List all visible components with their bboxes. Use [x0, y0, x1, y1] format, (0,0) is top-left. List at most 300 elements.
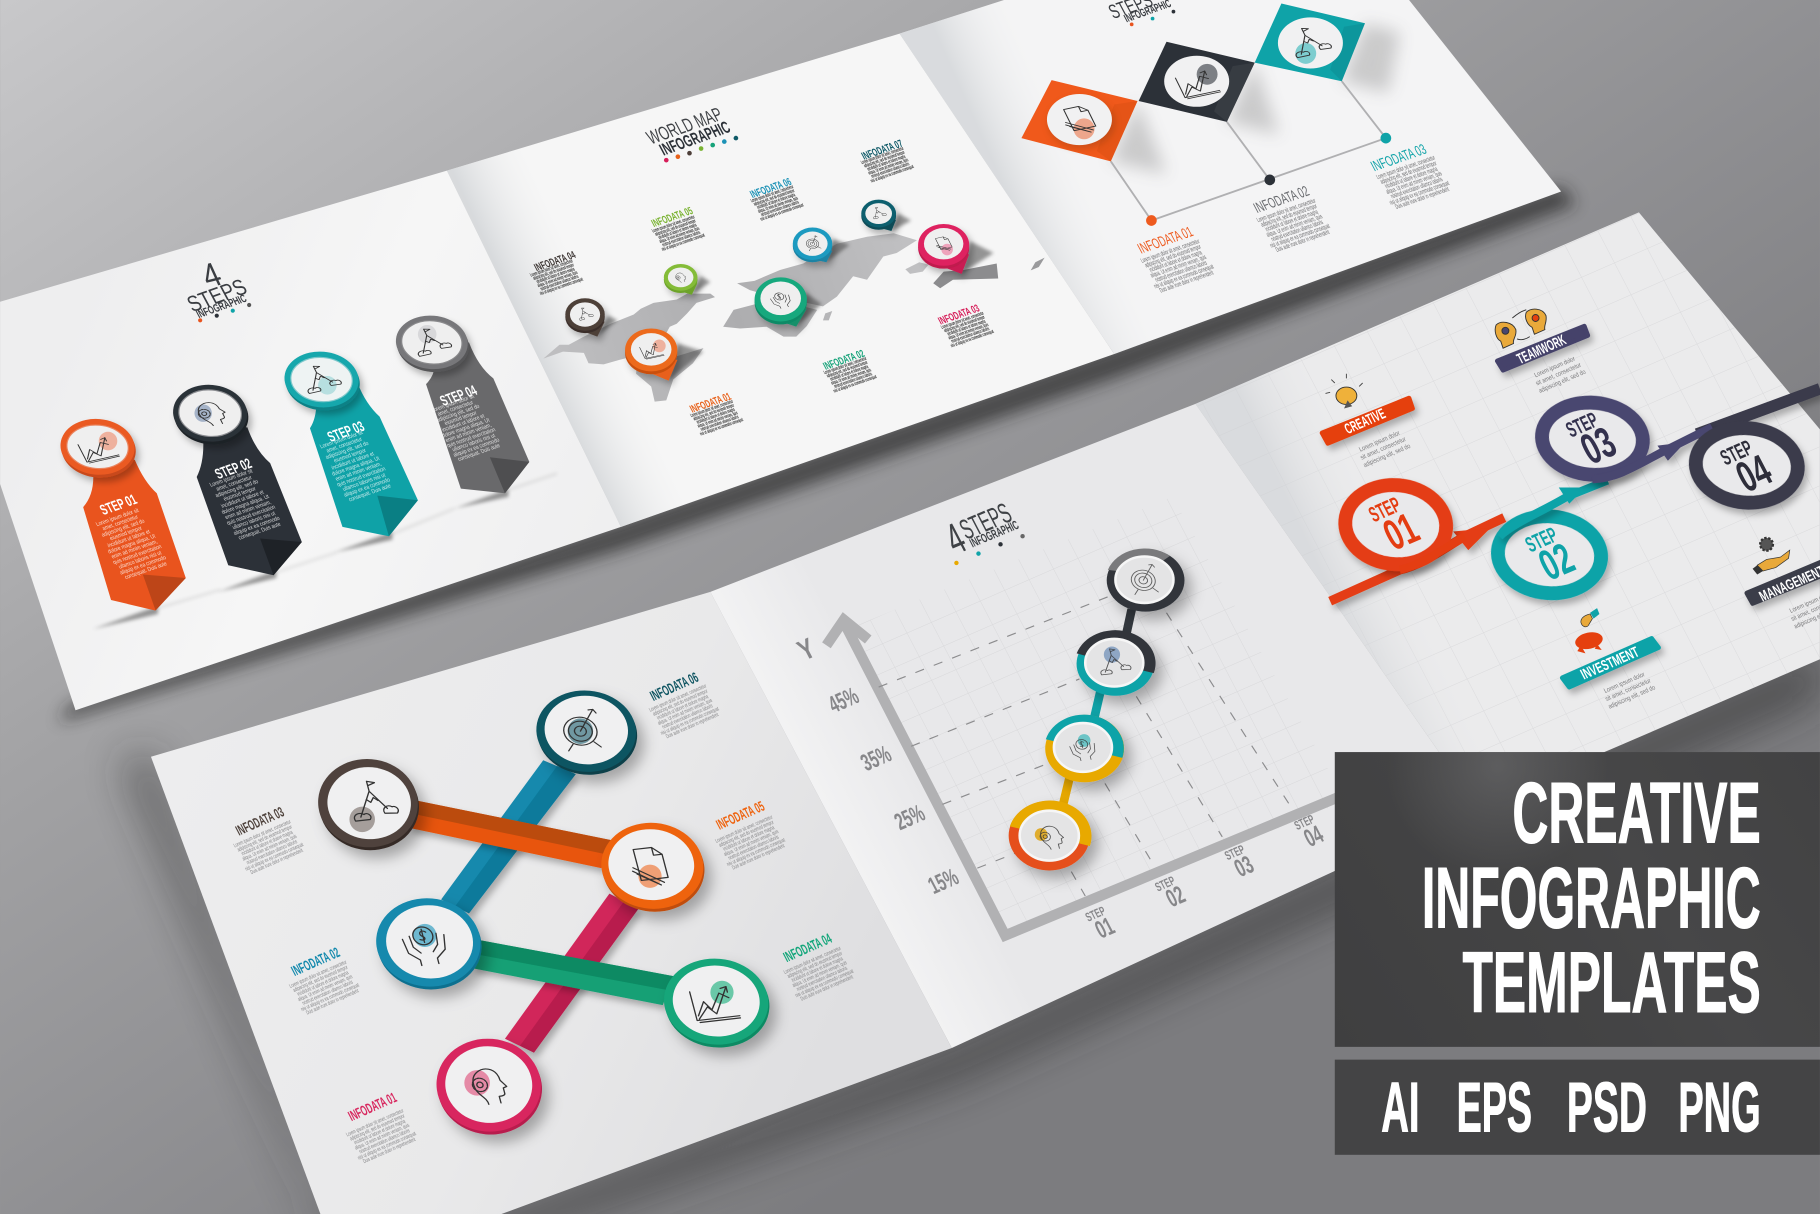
pin: step 02: ullamco laboris nisi ut: [231, 511, 277, 531]
callout: investment: Lorem ipsum dolor: [1603, 672, 1646, 695]
ring: step 04: [1693, 424, 1801, 507]
callout: investment: sit amet, consectetur: [1605, 678, 1652, 703]
title: 4 steps infographic: STEPS: [183, 275, 251, 317]
label: infodata 04: Duis aute irure dolor in reprehenderit: [799, 974, 855, 1003]
x axis values: [1083, 812, 1328, 944]
label: infodata 03 map: [936, 302, 995, 349]
y axis values: 15%: [924, 864, 963, 900]
y axis values: 35%: [857, 741, 896, 777]
label: infodata 01: INFODATA 01: [346, 1090, 400, 1125]
map pin: orange: [625, 328, 677, 381]
pin: step 04: ullamco laboris nisi ut: [451, 433, 497, 453]
shadow under top brochure: [58, 186, 1576, 722]
label: infodata 05: aliqua. Ut enim ad minim veniam, quis: [658, 225, 701, 244]
label: infodata 04: [528, 249, 584, 296]
title: 4 steps infographic: [183, 255, 251, 322]
label: infodata 03: nostrud exercitation ullamco laboris: [1390, 176, 1444, 201]
pin: step 01: ullamco laboris nisi ut: [118, 550, 163, 571]
map pin: dark teal: [861, 200, 896, 231]
label: infodata 02: Lorem ipsum dolor sit amet, consectetur: [1256, 198, 1317, 224]
panel: product title: [1335, 752, 1820, 1047]
callout: teamwork: sit amet, consectetur: [1535, 362, 1583, 387]
pin: step 02: [171, 382, 302, 575]
panel: file formats: [1335, 1060, 1820, 1155]
label: infodata 07: aliqua. Ut enim ad minim veniam, quis: [867, 156, 910, 176]
pin: step 01: adipiscing elit, sed do: [101, 518, 146, 539]
x axis values: STEP: [1153, 874, 1178, 895]
panel: world map: [528, 104, 1045, 437]
bar: orange: [407, 801, 612, 868]
circle: infodata 06: [533, 686, 641, 779]
bottom brochure sheet: [151, 212, 1820, 1214]
label: infodata 06: [648, 670, 723, 742]
label: infodata 02 map: Lorem ipsum dolor sit amet, consectetur: [822, 355, 868, 375]
pin: step 04: consequat. Duis aute: [457, 443, 502, 463]
pin: step 03: [282, 349, 418, 536]
label: infodata 07: Lorem ipsum dolor sit amet, consectetur: [859, 145, 905, 165]
title: 4 steps infographic: [937, 497, 1025, 565]
panel: steps flow: [1322, 309, 1820, 711]
pin: step 02: eiusmod tempor: [223, 486, 257, 503]
ribbon: red: [1330, 518, 1504, 601]
bar: green: [471, 940, 673, 1005]
ring: step 02: [1495, 512, 1604, 597]
ring: step 04: STEP: [1716, 435, 1757, 470]
page: world map: [447, 34, 1114, 527]
map pin: blue: [793, 227, 832, 262]
label: infodata 01: INFODATA 01: [1135, 224, 1196, 257]
label: infodata 03: Duis aute irure dolor in reprehenderit: [249, 847, 305, 876]
label: infodata 02: adipiscing elit, sed do eiusmod tempor: [1260, 203, 1319, 229]
page: diamonds: [900, 0, 1561, 354]
y axis label: Y: [793, 633, 821, 667]
circle: infodata 01: [433, 1034, 546, 1139]
chart grid: [853, 497, 1346, 938]
label: infodata 01: nostrud exercitation ullamco laboris: [358, 1127, 412, 1156]
label: infodata 01 map: [688, 391, 745, 437]
diamond: dark: [1139, 42, 1255, 122]
label: infodata 02: nisi ut aliquip ex ea commodo consequat: [300, 982, 361, 1013]
x axis values: 03: [1230, 851, 1258, 883]
label: infodata 03: incididunt ut labore et dolore magna: [1384, 166, 1440, 191]
x axis values: 04: [1300, 821, 1328, 853]
node: third: [1045, 715, 1124, 782]
label: infodata 03: [232, 804, 308, 878]
x axis values: STEP: [1222, 843, 1247, 864]
label: infodata 04: Lorem ipsum dolor sit amet, consectetur: [529, 257, 574, 278]
label: infodata 06: INFODATA 06: [748, 176, 793, 200]
callout: management: [1747, 561, 1820, 631]
label: infodata 02: Duis aute irure dolor in reprehenderit: [1275, 229, 1332, 254]
label: infodata 01: aliqua. Ut enim ad minim veniam, quis: [354, 1122, 411, 1152]
label: infodata 01: incididunt ut labore et dolore magna: [1148, 249, 1204, 274]
label: infodata 03: aliqua. Ut enim ad minim veniam, quis: [241, 833, 299, 863]
node: second: [1077, 630, 1156, 696]
label: infodata 03: incididunt ut labore et dolore magna: [240, 829, 294, 858]
pin: step 03: adipiscing elit, sed do: [325, 441, 370, 461]
pin: step 02: quis nostrud exercitation: [226, 504, 277, 527]
map pin: green: [755, 277, 807, 327]
format labels: AI: [1381, 1069, 1420, 1148]
pin: step 03: ullamco laboris nisi ut: [342, 472, 387, 493]
pin: step 03: dolore magna aliqua. Ut: [331, 456, 381, 478]
label: infodata 03 map: INFODATA 03: [936, 302, 981, 327]
label: infodata 01 map: Lorem ipsum dolor sit amet, consectetur: [689, 398, 734, 418]
callout: creative: sit amet, consectetur: [1360, 437, 1407, 462]
title text: [1422, 766, 1761, 1031]
label: infodata 02 map: [821, 348, 878, 394]
label: infodata 03: adipiscing elit, sed do eiusmod tempor: [236, 824, 294, 854]
label: infodata 01 map: adipiscing elit, sed do eiusmod tempor: [692, 402, 735, 422]
label: infodata 05: [649, 205, 706, 252]
ring: step 03: 03: [1573, 418, 1624, 474]
label: infodata 06: nisi ut aliquip ex ea commodo consequat: [660, 705, 721, 737]
label: infodata 03: Lorem ipsum dolor sit amet, consectetur: [1375, 155, 1437, 182]
circle: infodata 02: [372, 894, 485, 994]
label: infodata 03: nostrud exercitation ullamco laboris: [245, 838, 299, 867]
label: infodata 02 map: INFODATA 02: [821, 348, 867, 372]
label: infodata 03: aliqua. Ut enim ad minim veniam, quis: [1385, 170, 1444, 196]
diamond: teal: [1255, 3, 1365, 81]
ring: step 01: 01: [1375, 504, 1426, 559]
label: infodata 05: INFODATA 05: [714, 798, 768, 833]
circle: infodata 03: [314, 755, 423, 854]
ring: step 01: STEP: [1365, 492, 1405, 527]
pin: step 01: consequat. Duis aute: [124, 561, 168, 581]
label: infodata 01: nostrud exercitation ullamco laboris: [1154, 260, 1209, 284]
label: infodata 04: INFODATA 04: [781, 931, 835, 966]
label: infodata 06: Lorem ipsum dolor sit amet, consectetur: [648, 683, 708, 714]
label: infodata 06: incididunt ut labore et dolore magna: [755, 191, 797, 210]
icon: gear and hand: [1753, 538, 1790, 575]
label: infodata 03 map: incididunt ut labore et dolore magna: [946, 318, 987, 337]
label: infodata 03 map: aliqua. Ut enim ad minim veniam, quis: [947, 321, 990, 341]
label: infodata 02 map: nostrud exercitation ullamco laboris: [833, 370, 874, 389]
title: world map infographic: [643, 104, 738, 162]
ribbon: purple: [1592, 427, 1712, 479]
label: infodata 06: [748, 176, 805, 222]
label: infodata 03 map: nostrud exercitation ullamco laboris: [950, 325, 991, 344]
label: infodata 06: Lorem ipsum dolor sit amet, consectetur: [749, 183, 795, 204]
label: infodata 02: nostrud exercitation ullamco laboris: [1270, 219, 1325, 244]
ground shadows: [93, 489, 508, 629]
label: infodata 02: [288, 945, 363, 1018]
pin: step 04: Lorem ipsum dolor sit: [430, 394, 476, 414]
label: infodata 03 map: nisi ut aliquip ex ea commodo consequat: [949, 328, 995, 349]
ring: step 02: STEP: [1521, 522, 1562, 557]
ring: step 04: 04: [1728, 446, 1780, 501]
label: infodata 05: nisi ut aliquip ex ea commodo consequat: [726, 837, 787, 868]
label: infodata 06: aliqua. Ut enim ad minim veniam, quis: [756, 195, 799, 214]
label: infodata 02: INFODATA 02: [1251, 183, 1312, 216]
label: infodata 01: nisi ut aliquip ex ea commodo consequat: [357, 1130, 418, 1162]
callout: creative: Lorem ipsum dolor: [1358, 430, 1401, 454]
label: infodata 06: aliqua. Ut enim ad minim veniam, quis: [657, 697, 714, 727]
label: infodata 05: adipiscing elit, sed do eiusmod tempor: [653, 217, 697, 237]
label: infodata 05: Lorem ipsum dolor sit amet, consectetur: [714, 814, 774, 845]
page: graph: [710, 404, 1476, 1048]
callout: investment: INVESTMENT: [1578, 644, 1642, 683]
label: infodata 05: nostrud exercitation ullamco laboris: [661, 229, 702, 248]
pin: step 04: dolore magna aliqua. Ut: [441, 417, 492, 440]
label: infodata 01 map: incididunt ut labore et dolore magna: [695, 406, 736, 425]
x axis values: STEP: [1083, 904, 1108, 925]
ring: step 03: STEP: [1562, 407, 1602, 442]
callout: creative: adipiscing elit, sed do: [1363, 443, 1412, 469]
ribbon: teal: [1500, 480, 1608, 536]
label: infodata 02: INFODATA 02: [289, 945, 343, 979]
top brochure sheet: [0, 0, 1561, 710]
bar: blue: [441, 760, 576, 913]
page: 4 steps: [0, 171, 621, 710]
ring: step 02: 02: [1531, 534, 1582, 590]
icon: teamwork heads: [1495, 309, 1546, 348]
label: infodata 01: Lorem ipsum dolor sit amet, consectetur: [345, 1107, 405, 1139]
label: infodata 01 map: INFODATA 01: [688, 391, 733, 415]
shadow under bottom brochure: [122, 650, 1820, 1214]
pin: step 01: amet, consectetur: [101, 514, 140, 532]
label: infodata 01: incididunt ut labore et dolore magna: [353, 1118, 407, 1147]
label: infodata 04: nostrud exercitation ullamco laboris: [539, 273, 580, 292]
pin: step 03: STEP 03: [325, 418, 367, 445]
pin: step 01: STEP 01: [97, 491, 140, 518]
label: infodata 05: Duis aute irure dolor in reprehenderit: [731, 842, 787, 872]
label: infodata 05: nisi ut aliquip ex ea commodo consequat: [660, 232, 706, 252]
chart axes: [826, 620, 1346, 935]
label: infodata 05: incididunt ut labore et dolore magna: [722, 824, 776, 853]
label: infodata 03: INFODATA 03: [1368, 141, 1429, 175]
label: infodata 04: incididunt ut labore et dolore magna: [535, 265, 576, 284]
panel: diamonds timeline: [1021, 0, 1454, 296]
label: infodata 02 map: adipiscing elit, sed do eiusmod tempor: [825, 359, 869, 379]
label: infodata 03: Duis aute irure dolor in reprehenderit: [1394, 186, 1451, 211]
map pin: lime: [664, 264, 697, 295]
label: infodata 02 map: aliqua. Ut enim ad minim veniam, quis: [830, 366, 873, 386]
label: infodata 02: nostrud exercitation ullamco laboris: [301, 979, 355, 1007]
pin: step 02: amet, consectetur: [215, 475, 254, 493]
pin: step 03: consequat. Duis aute: [348, 483, 392, 503]
label: infodata 06: adipiscing elit, sed do eiusmod tempor: [652, 688, 709, 718]
faint ground streaks: [158, 474, 557, 608]
format labels: [1381, 1069, 1761, 1148]
pin: step 02: dolore magna aliqua. Ut: [221, 494, 271, 516]
label: infodata 01: Duis aute irure dolor in reprehenderit: [362, 1136, 418, 1165]
callout: teamwork: Lorem ipsum dolor: [1534, 356, 1577, 379]
label: infodata 03: Lorem ipsum dolor sit amet, consectetur: [232, 818, 293, 850]
label: infodata 01: [1135, 224, 1218, 296]
label: infodata 05: aliqua. Ut enim ad minim veniam, quis: [723, 828, 780, 858]
page: connected circles: [151, 592, 952, 1214]
pin: step 04: STEP 04: [437, 382, 480, 409]
title: 4 steps infographic: STEPS: [954, 497, 1017, 545]
label: infodata 04: aliqua. Ut enim ad minim veniam, quis: [791, 959, 849, 989]
label: infodata 01 map: aliqua. Ut enim ad minim veniam, quis: [696, 409, 739, 429]
world map landmass: [543, 233, 1045, 402]
callout: teamwork: [1497, 326, 1588, 395]
label: infodata 01: nisi ut aliquip ex ea commodo consequat: [1153, 264, 1216, 291]
label: infodata 01: [345, 1090, 420, 1167]
label: infodata 05: [714, 798, 789, 873]
pin: step 03: eiusmod tempor: [333, 448, 368, 465]
label: infodata 03: nisi ut aliquip ex ea commodo consequat: [244, 841, 305, 873]
title: 4 steps infographic: INFOGRAPHIC: [194, 293, 249, 321]
label: infodata 01: Lorem ipsum dolor sit amet, consectetur: [1140, 238, 1201, 265]
page: steps flow: [1196, 212, 1820, 805]
panel: connected circles: [232, 670, 858, 1167]
bar: pink: [505, 894, 638, 1053]
label: infodata 05: INFODATA 05: [649, 205, 695, 229]
label: infodata 05: nostrud exercitation ullamco laboris: [727, 834, 781, 862]
label: infodata 06: Duis aute irure dolor in reprehenderit: [665, 711, 720, 741]
pin: step 04: enim ad minim veniam,: [444, 422, 493, 444]
pin: step 02: incididunt ut labore et: [220, 489, 266, 510]
dots: [1146, 133, 1391, 226]
label: infodata 02: nisi ut aliquip ex ea commodo consequat: [1269, 223, 1332, 250]
label: infodata 04: adipiscing elit, sed do eiusmod tempor: [786, 950, 844, 980]
label: infodata 04: Lorem ipsum dolor sit amet, consectetur: [783, 945, 843, 976]
pin: step 04: quis nostrud exercitation: [446, 427, 497, 450]
title: 4 steps infographic: 4: [937, 514, 974, 563]
label: infodata 01: aliqua. Ut enim ad minim veniam, quis: [1149, 254, 1208, 280]
label: infodata 05: incididunt ut labore et dolore magna: [657, 221, 698, 240]
panel: step graph: [793, 497, 1346, 944]
pin: step 01: eiusmod tempor: [109, 525, 144, 542]
pin: step 04: adipiscing elit, sed do: [436, 403, 481, 424]
callout: teamwork: adipiscing elit, sed do: [1538, 369, 1588, 395]
label: infodata 06: incididunt ut labore et dolore magna: [656, 693, 710, 722]
pin: step 01: aliquip ex ea commodo: [119, 555, 167, 577]
pin: step 03: incididunt ut labore et: [330, 451, 376, 472]
map pin: pink: [918, 224, 969, 274]
label: infodata 06: INFODATA 06: [648, 670, 702, 704]
pin: step 03: enim ad minim veniam,: [334, 461, 383, 483]
label: infodata 03 map: Lorem ipsum dolor sit amet, consectetur: [940, 310, 985, 330]
label: infodata 02 map: incididunt ut labore et dolore magna: [829, 363, 870, 382]
pin: step 03: amet, consectetur: [325, 436, 364, 455]
label: infodata 04: nostrud exercitation ullamco laboris: [796, 965, 849, 993]
pin: step 04: incididunt ut labore et: [441, 413, 486, 434]
label: infodata 07: [859, 138, 915, 184]
label: infodata 03: INFODATA 03: [233, 804, 287, 839]
ring: step 01: [1342, 481, 1465, 570]
pin: step 01: incididunt ut labore et: [106, 529, 152, 549]
format labels: EPS: [1457, 1069, 1532, 1148]
icon: light bulb: [1325, 374, 1363, 409]
circle: infodata 05: [598, 819, 708, 916]
label: infodata 01: adipiscing elit, sed do eiusmod tempor: [1144, 244, 1203, 270]
pin: step 04: eiusmod tempor: [443, 410, 478, 427]
pin: step 01: quis nostrud exercitation: [112, 544, 163, 566]
label: infodata 07: nostrud exercitation ullamco laboris: [870, 160, 911, 179]
y axis values: [824, 683, 963, 900]
pin: step 02: aliquip ex ea commodo: [233, 515, 281, 537]
diamond: orange: [1021, 80, 1137, 161]
pin: step 02: Lorem ipsum dolor sit: [209, 468, 254, 489]
label: infodata 02 map: nisi ut aliquip ex ea commodo consequat: [832, 373, 878, 394]
connector lines: [1111, 81, 1386, 221]
pin: step 02: enim ad minim veniam,: [224, 499, 273, 521]
format labels: PSD: [1567, 1069, 1647, 1148]
label: infodata 04: aliqua. Ut enim ad minim veniam, quis: [536, 269, 579, 288]
x axis values: 01: [1091, 913, 1119, 944]
callout: creative: [1322, 398, 1413, 469]
pin: step 02: STEP 02: [212, 455, 255, 482]
callout: investment: [1562, 638, 1659, 711]
label: infodata 02: incididunt ut labore et dolore magna: [296, 969, 350, 998]
x axis values: 02: [1162, 881, 1190, 913]
title: world map infographic: INFOGRAPHIC: [657, 119, 734, 160]
pin: step 01: [58, 416, 186, 610]
pin: step 01: dolore magna aliqua. Ut: [107, 533, 157, 556]
pin: step 03: Lorem ipsum dolor sit: [319, 430, 365, 450]
label: infodata 06: nisi ut aliquip ex ea commodo consequat: [759, 201, 805, 222]
label: infodata 07: INFODATA 07: [859, 138, 905, 162]
label: infodata 04: nisi ut aliquip ex ea commodo consequat: [538, 276, 584, 296]
label: infodata 04: nisi ut aliquip ex ea commodo consequat: [794, 968, 856, 1000]
title: 4 steps infographic: 4: [195, 255, 227, 295]
callout: creative: CREATIVE: [1341, 405, 1388, 438]
label: infodata 04: adipiscing elit, sed do eiusmod tempor: [532, 261, 575, 281]
label: infodata 03 map: adipiscing elit, sed do eiusmod tempor: [942, 314, 986, 333]
pin cast shadows: [597, 214, 994, 381]
label: infodata 02: [1251, 183, 1334, 255]
label: infodata 04: INFODATA 04: [532, 249, 578, 273]
label: infodata 01: Duis aute irure dolor in reprehenderit: [1159, 270, 1215, 295]
label: infodata 02: Lorem ipsum dolor sit amet, consectetur: [288, 959, 348, 990]
label: infodata 05: Lorem ipsum dolor sit amet, consectetur: [651, 213, 696, 234]
label: infodata 01 map: nostrud exercitation ullamco laboris: [699, 413, 740, 432]
ring: step 03: [1539, 398, 1646, 479]
label: infodata 01 map: nisi ut aliquip ex ea commodo consequat: [698, 416, 745, 437]
pin: step 04: [394, 313, 529, 493]
pin: step 03: aliquip ex ea commodo: [343, 477, 391, 499]
callout: teamwork: TEAMWORK: [1514, 331, 1569, 367]
label: infodata 03: adipiscing elit, sed do eiusmod tempor: [1379, 160, 1438, 186]
circle: infodata 04: [660, 954, 773, 1052]
label: infodata 06: adipiscing elit, sed do eiusmod tempor: [752, 187, 796, 207]
connectors: [1062, 609, 1132, 809]
pin: step 04: amet, consectetur: [437, 400, 475, 418]
title: world map infographic: WORLD MAP: [643, 104, 726, 149]
map pin: brown: [565, 298, 605, 337]
label: infodata 04: incididunt ut labore et dolore magna: [790, 955, 845, 984]
ribbon: dark: [1697, 389, 1820, 434]
pin: step 04: aliquip ex ea commodo: [452, 437, 501, 459]
label: infodata 05: adipiscing elit, sed do eiusmod tempor: [718, 819, 776, 849]
label: infodata 06: nostrud exercitation ullamco laboris: [759, 199, 800, 217]
label: infodata 07: adipiscing elit, sed do eiusmod tempor: [862, 149, 906, 169]
y axis values: 25%: [890, 801, 930, 836]
y axis values: 45%: [824, 683, 864, 719]
node: fourth: [1009, 801, 1092, 870]
diamond shadows: [1111, 23, 1400, 174]
label: infodata 03: nisi ut aliquip ex ea commodo consequat: [1388, 180, 1451, 207]
pin: step 03: quis nostrud exercitation: [336, 466, 387, 489]
dashed guide lines: [879, 597, 1293, 896]
label: infodata 06: nostrud exercitation ullamco laboris: [661, 703, 715, 731]
pin: step 01: enim ad minim veniam,: [110, 539, 159, 561]
icon: piggy bank: [1574, 608, 1604, 653]
pin: step 02: consequat. Duis aute: [238, 521, 282, 542]
callout: investment: adipiscing elit, sed do: [1608, 685, 1657, 711]
label: infodata 01: adipiscing elit, sed do eiusmod tempor: [349, 1113, 406, 1143]
label: infodata 04: [781, 931, 858, 1004]
label: infodata 02: aliqua. Ut enim ad minim veniam, quis: [1265, 213, 1324, 239]
label: infodata 02: Duis aute irure dolor in reprehenderit: [305, 988, 361, 1017]
x axis values: STEP: [1292, 812, 1317, 833]
label: infodata 07: incididunt ut labore et dolore magna: [866, 153, 907, 172]
label: infodata 02: adipiscing elit, sed do eiusmod tempor: [292, 964, 350, 994]
